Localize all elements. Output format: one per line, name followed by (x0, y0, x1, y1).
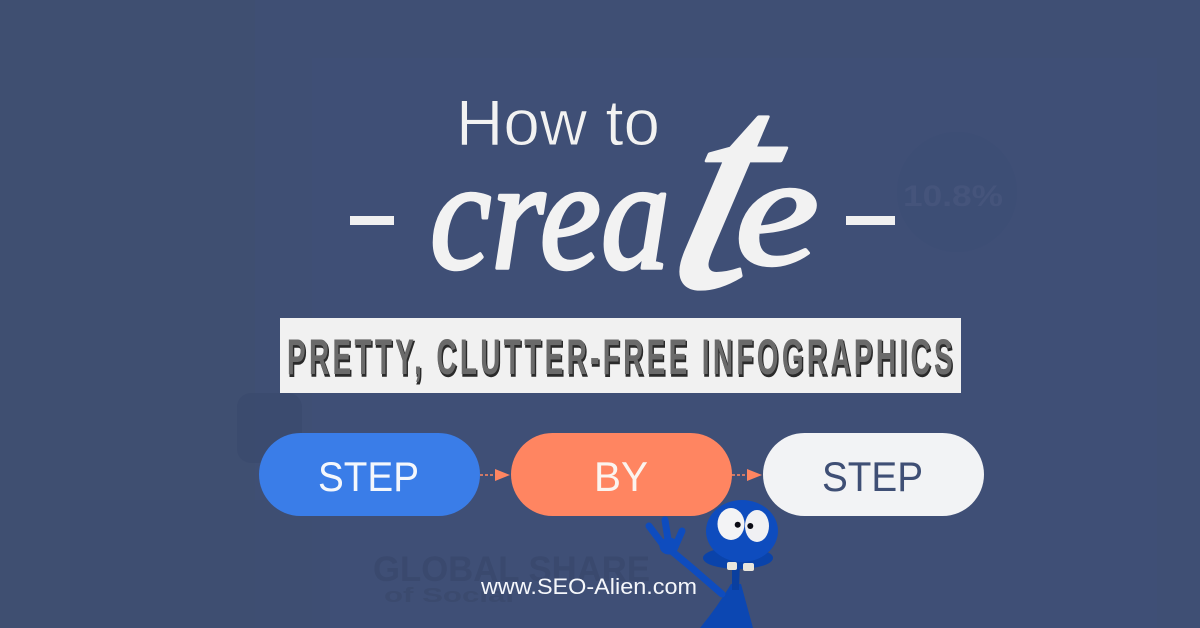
pill: BY orange (511, 433, 732, 516)
pill: STEP blue (259, 433, 480, 516)
alien neck (732, 562, 740, 590)
icon: blue alien mascot (649, 500, 778, 628)
heading script word: create: t (646, 19, 823, 351)
ghost background text: 10.8% (903, 180, 1003, 213)
alien left eye (718, 508, 744, 540)
alien arm and hand (649, 520, 722, 594)
alien teeth (727, 562, 754, 571)
pill: STEP blue: STEP (318, 453, 419, 500)
heading: How to: How to (456, 86, 660, 159)
pill: BY orange: BY (594, 453, 648, 500)
heading script word: create: e (735, 124, 819, 299)
pill: STEP white: STEP (822, 453, 923, 500)
pill: STEP white (763, 433, 984, 516)
heading dash: right (846, 216, 895, 225)
alien head (706, 500, 778, 562)
subtitle banner (280, 318, 961, 393)
alien right eye (745, 510, 769, 542)
ghost background text: GLOBAL SHARE (373, 550, 650, 589)
ghost background text: of Social (384, 585, 514, 607)
heading script word: create: crea (430, 128, 670, 303)
heading script word: create (430, 19, 823, 351)
alien pupils (735, 522, 753, 529)
alien body (700, 584, 753, 628)
website url: www.SEO-Alien.com (480, 574, 697, 599)
alien jaw (703, 547, 773, 569)
arrow: step to by (480, 469, 510, 481)
arrow: by to step (732, 469, 762, 481)
ghost background text (373, 180, 1003, 607)
heading dash: left (350, 216, 394, 225)
